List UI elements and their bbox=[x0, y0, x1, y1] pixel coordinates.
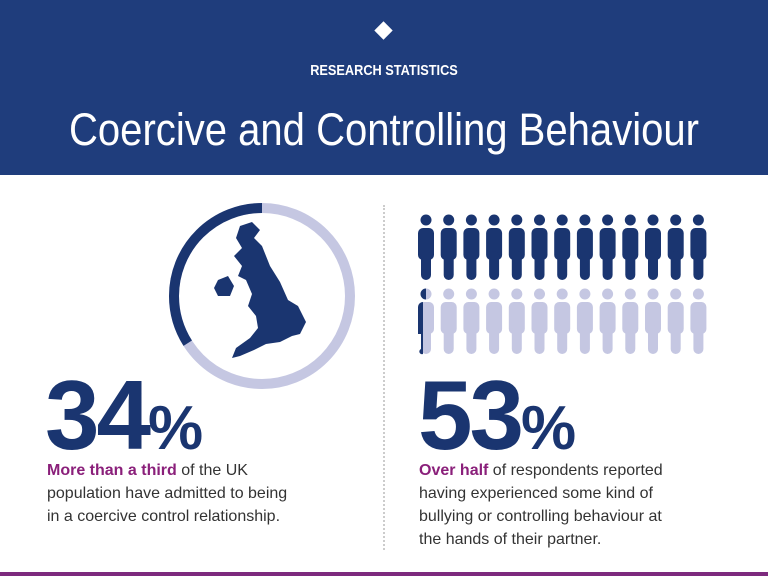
text bbox=[419, 462, 663, 548]
stat 34%: 34% bbox=[45, 360, 203, 470]
panel: respondents bbox=[418, 214, 706, 548]
panel: UK bbox=[45, 203, 355, 525]
divider dotted bbox=[383, 205, 385, 550]
text bbox=[47, 462, 287, 525]
text: Over half of respondents reported bbox=[419, 462, 663, 479]
ring chart with UK map bbox=[169, 203, 355, 389]
text: population have admitted to being bbox=[47, 485, 287, 502]
text: in a coercive control relationship. bbox=[47, 508, 280, 525]
text: More than a third of the UK bbox=[47, 462, 248, 479]
text: bullying or controlling behaviour at bbox=[419, 508, 662, 525]
people pictogram bbox=[418, 214, 706, 354]
text: the hands of their partner. bbox=[419, 531, 601, 548]
stat 53%: 53% bbox=[418, 360, 576, 470]
subtitle: RESEARCH STATISTICS bbox=[310, 62, 458, 79]
title: Coercive and Controlling Behaviour bbox=[69, 104, 699, 155]
icon: diamond bbox=[374, 21, 393, 40]
bottom bar bbox=[0, 572, 768, 576]
header banner bbox=[0, 0, 768, 175]
text: having experienced some kind of bbox=[419, 485, 653, 502]
